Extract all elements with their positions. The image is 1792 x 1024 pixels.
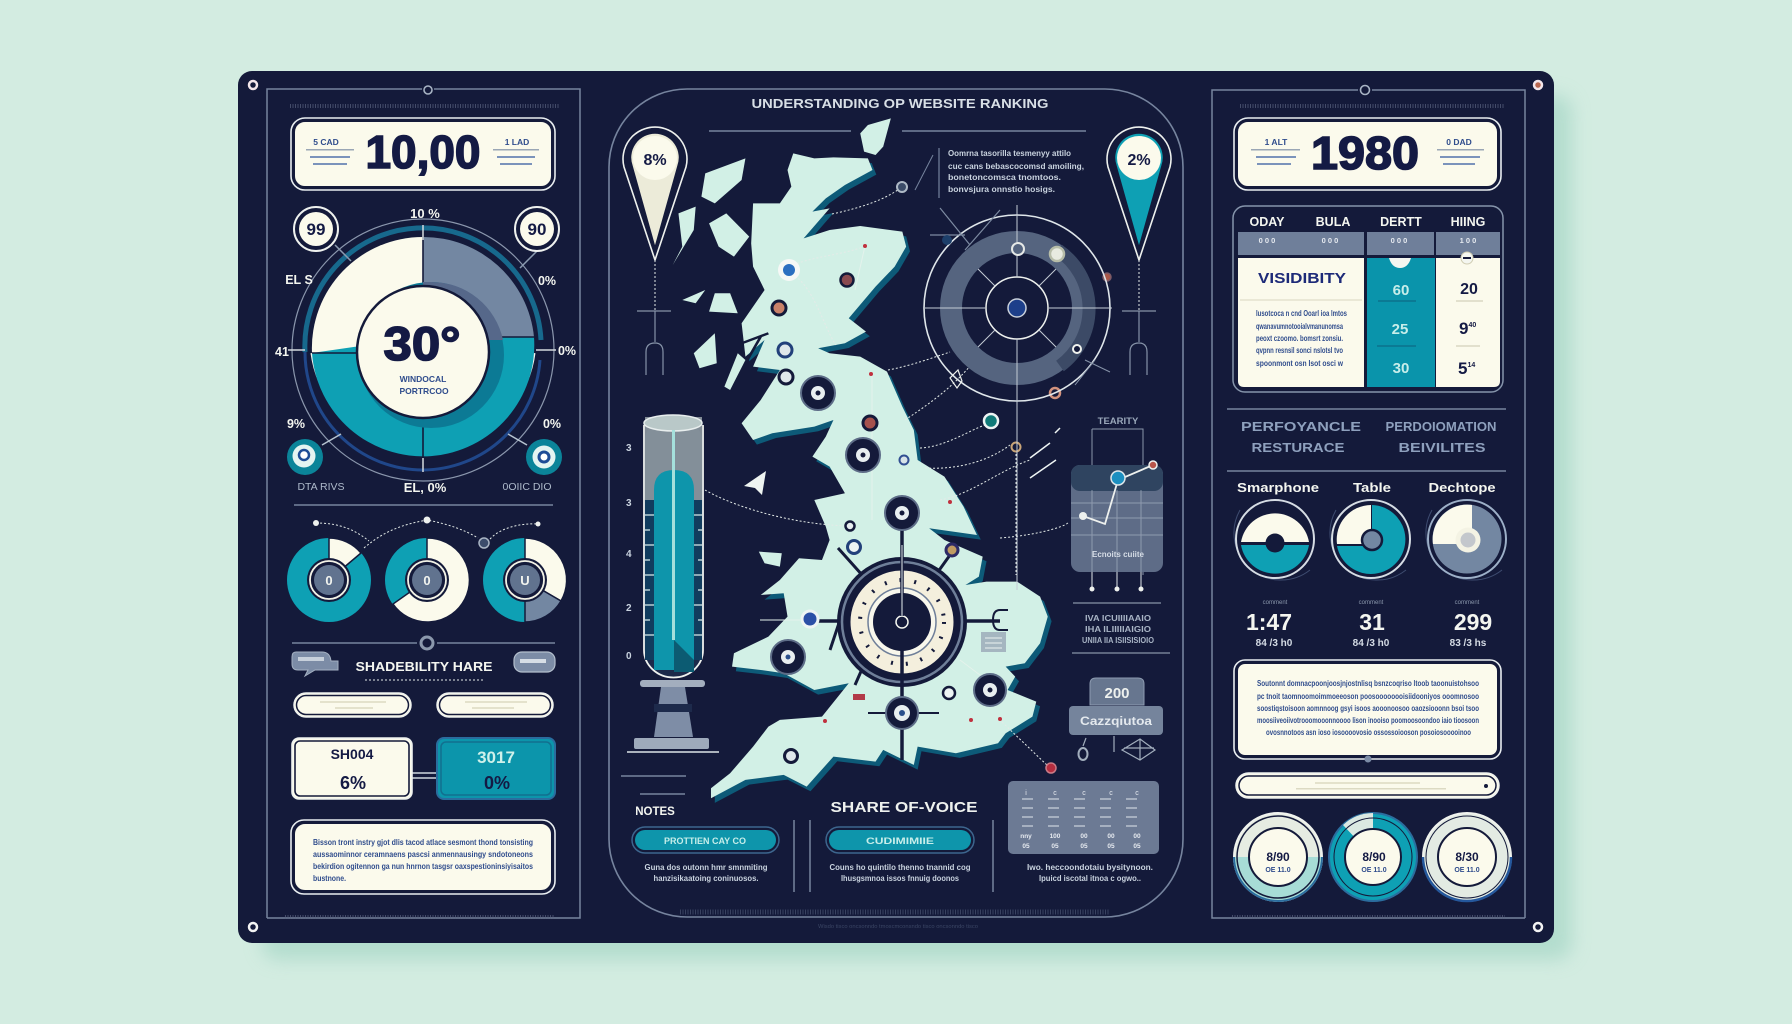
table: visibility: 60: [1393, 282, 1409, 299]
title: UNDERSTANDING OP WEBSITE RANKING: [752, 96, 1048, 111]
table: visibility: spoonmont osn Isot osci w: [1256, 358, 1343, 368]
text block: map note: Oomrna tasorilla tesmenyy attilo: [948, 148, 1071, 158]
table: visibility: Iusotcoca n cnd Ooarl ioa lmtos: [1256, 308, 1347, 318]
note card: pc tnoit taomnoomoimmoeeoson poosoooooooisiidooniyos ooomnosoo: [1257, 691, 1479, 701]
dashboard board: [238, 71, 1554, 943]
device stats: 1:47: [1246, 609, 1292, 635]
data table: slate grid: 00: [1133, 833, 1141, 840]
table: visibility: 5: [1458, 359, 1467, 378]
device stats: 31: [1359, 609, 1385, 635]
callout badge: 90: 90: [528, 220, 546, 239]
table: visibility: DERTT: [1380, 215, 1422, 229]
note card: moosiiveoiivotrooomooonnoooo lison inooiso poomoosoondoo iaio tioosoon: [1257, 715, 1479, 725]
pin: left percent: [623, 127, 687, 375]
ring gauge: right: OE 11.0: [1454, 867, 1480, 874]
thermometer gauge: 3: [626, 498, 632, 509]
pill: right blank: [437, 693, 553, 717]
icon: right target: [508, 434, 562, 475]
thermometer gauge: 3: [626, 443, 632, 454]
table: visibility: BULA: [1316, 215, 1350, 229]
ring gauge: right: 8/30: [1455, 850, 1479, 864]
icon: left speech bubble: [292, 652, 338, 676]
heading: performance pair: [1241, 420, 1496, 455]
ring gauge: left: OE 11.0: [1265, 867, 1291, 874]
stat card: 3017: 0%: [484, 773, 510, 793]
note card: soostiqstoisoon aomnnoog gsyi isoos aooonoosoo oaozsiooonn bsoi tsoo: [1257, 703, 1479, 713]
ring gauge: middle: 8/90: [1362, 850, 1386, 864]
note card: bekirdion ogitennon ga nun hnrnon tasgsr oaxspestioninsiyisaitos: [313, 861, 533, 871]
data table: slate grid: nny: [1020, 833, 1032, 840]
pill button: right: CUDIMIMIIE: [866, 836, 934, 847]
markers: outside map: [897, 182, 1111, 773]
callout badge: 90: [515, 207, 559, 251]
device labels: Smarphone: [1237, 480, 1319, 495]
table: visibility: [1233, 206, 1503, 392]
map: United Kingdom: [673, 118, 1052, 803]
donut chart: main share: 30°: [384, 317, 460, 370]
donut: small one: 0: [325, 573, 333, 588]
line chart: trend: [1071, 416, 1163, 592]
device stats: 299: [1454, 609, 1492, 635]
dial: central compass: [810, 528, 1008, 760]
pill button: right: [826, 827, 974, 853]
pill: left blank: [294, 693, 411, 717]
heading: performance pair: PERDOIOMATION: [1386, 420, 1496, 434]
text block: trend note: UNIIA IIA ISIISISIOIO: [1082, 635, 1154, 645]
table: visibility: 40: [1468, 322, 1476, 329]
note card: ovosnnotoos asn ioso iosoooovosio ossossoiooson posoiosooooinoo: [1266, 727, 1471, 737]
thermometer gauge: 0: [626, 651, 632, 662]
donut value labels: 0%: [543, 417, 561, 431]
table: visibility: qwanavumnotooialvmanunomsa: [1256, 321, 1343, 331]
thermometer gauge: 4: [626, 549, 632, 560]
data table: slate grid: i: [1025, 790, 1027, 797]
data table: slate grid: 05: [1080, 843, 1088, 850]
map markers: small pins: [772, 259, 958, 762]
device stats: comment: [1455, 600, 1480, 606]
stat tag: 200: Cazzqiutoa: [1080, 714, 1152, 728]
table: visibility: 25: [1392, 321, 1408, 338]
line chart: trend: TEARITY: [1098, 416, 1139, 427]
icon: right speech bubble: [514, 652, 555, 672]
table: visibility: peoxt czoomo. bomsrt zonsiu.: [1256, 333, 1343, 343]
note card: [1234, 660, 1501, 762]
caption: right: Ipuicd iscotal itnoa c ogwo..: [1039, 873, 1141, 883]
donut value labels: 10 %: [410, 206, 440, 221]
donut value labels: [275, 206, 576, 495]
device stats: 84 /3 h0: [1353, 638, 1390, 649]
caption: right: [1027, 862, 1153, 883]
caption: centre: Couns ho quintilo thenno tnannid cog: [830, 862, 970, 872]
table: visibility: 0 0 0: [1322, 236, 1338, 245]
device gauge: desktop: [1426, 500, 1506, 580]
table: visibility: 30: [1393, 360, 1409, 377]
note card: [291, 820, 555, 894]
caption: left: Guna dos outonn hmr smnmiting: [644, 862, 768, 872]
comparison: year cards: [292, 738, 555, 799]
ring gauge: left: [1234, 813, 1322, 901]
icon: arrow pointer: [744, 471, 766, 495]
heading: shareability: SHADEBILITY HARE: [356, 659, 493, 674]
device gauge: smartphone: [1234, 500, 1314, 580]
data table: slate grid: 100: [1050, 833, 1061, 840]
note card: bustnone.: [313, 873, 346, 883]
device labels: Dechtope: [1428, 480, 1496, 495]
stat card: 1980: 0 DAD: [1446, 137, 1472, 147]
device labels: Table: [1353, 480, 1391, 495]
callout badge: 99: 99: [307, 220, 325, 239]
caption: centre: [830, 862, 970, 883]
device stats: comment: [1359, 600, 1384, 606]
pin: left percent: 8%: [643, 152, 667, 169]
line chart: trend: Ecnoits cuiite: [1092, 550, 1145, 559]
donut value labels: EL, 0%: [404, 480, 447, 495]
stat card: 1980: [1234, 118, 1501, 190]
donut chart: main share: PORTRCOO: [399, 386, 449, 396]
donut chart: main share: WINDOCAL: [400, 374, 446, 384]
device labels: [1237, 480, 1496, 495]
stat tag: 200: [1069, 678, 1163, 760]
thermometer gauge: 2: [626, 603, 632, 614]
note card: Soutonnt domnacpoonjoosjnjostnlisq bsnzcoqriso ltoob taoonuistohsoo: [1257, 678, 1479, 688]
note card: aussaominnor ceramnaens pascsi anmennausingy sndotoneons: [313, 849, 533, 859]
ring gauge: middle: OE 11.0: [1361, 867, 1387, 874]
stat card: 1980: 1980: [1311, 127, 1419, 179]
device stats: 83 /3 hs: [1450, 638, 1487, 649]
text block: map note: cuc cans bebascocomsd amoiling,: [948, 161, 1084, 171]
ring gauge: left: 8/90: [1266, 850, 1290, 864]
panel: centre map: [609, 89, 1183, 930]
data table: slate grid: [1008, 781, 1159, 854]
map markers: large rings: [771, 376, 1006, 729]
table: visibility: 14: [1467, 362, 1475, 369]
data table: slate grid: c: [1053, 790, 1057, 797]
heading: share of voice: SHARE OF-VOICE: [830, 799, 978, 816]
thermometer gauge: [626, 415, 719, 752]
donut value labels: EL S: [285, 273, 313, 287]
table: visibility: 0 0 0: [1259, 236, 1275, 245]
text block: trend note: IVA ICUIIIIAAIO: [1085, 613, 1151, 623]
map markers: red dots: [823, 244, 1002, 723]
donut value labels: 0%: [558, 344, 576, 358]
stat card: 10,00: 1 LAD: [505, 137, 529, 147]
table: visibility: HIING: [1451, 215, 1485, 229]
table: visibility: qvpnn resnsil sonci nslotsl tvo: [1256, 345, 1343, 355]
stat tag: 200: 200: [1104, 685, 1130, 702]
donut value labels: 9%: [287, 417, 305, 431]
stat card: 1980: 1 ALT: [1265, 137, 1288, 147]
ring gauge: right: [1423, 813, 1511, 901]
data table: slate grid: c: [1082, 790, 1086, 797]
donut chart: main share: [288, 219, 556, 481]
donut: small two: [385, 538, 469, 622]
panel: left metrics: [267, 86, 580, 918]
text block: trend note: IHA ILIIIIIAIGIO: [1085, 624, 1151, 634]
stat card: 10,00: [291, 118, 555, 190]
donut: small three: [483, 538, 567, 622]
data table: slate grid: 05: [1107, 843, 1115, 850]
label: notes: NOTES: [635, 806, 675, 818]
pill: progress: [1236, 773, 1499, 798]
stat card: 3017: [437, 738, 555, 799]
text block: map note: bonvsjura onnstio hosigs.: [948, 184, 1055, 194]
donut: small two: 0: [423, 573, 431, 588]
device stats: 84 /3 h0: [1256, 638, 1293, 649]
pin: right percent: 2%: [1127, 152, 1151, 169]
data table: slate grid: c: [1135, 790, 1139, 797]
note card: Bisson tront instry gjot dlis tacod atlace sesmont thond tonsisting: [313, 837, 533, 847]
pin: right percent: [1107, 127, 1171, 375]
donut: small one: [287, 538, 371, 622]
donut value labels: 0%: [538, 274, 556, 288]
pill button: left: [632, 827, 779, 853]
table: visibility: 20: [1460, 281, 1478, 298]
stat card: 2004: [292, 738, 412, 799]
device gauge: tablet: [1330, 500, 1410, 580]
text block: trend note: [1072, 603, 1170, 653]
caption: right: Iwo. heccoondotaiu bysitynoon.: [1027, 862, 1153, 872]
icon: left target: [287, 434, 341, 475]
donut value labels: 41: [275, 345, 289, 359]
data table: slate grid: 05: [1133, 843, 1141, 850]
caption: left: [644, 862, 768, 883]
pill button: left: PROTTIEN CAY CO: [664, 836, 746, 847]
heading: performance pair: RESTURACE: [1252, 441, 1344, 455]
device stats: [1246, 600, 1492, 649]
heading: performance pair: PERFOYANCLE: [1241, 420, 1361, 434]
text block: map note: [915, 148, 1084, 198]
connectors: map links: [705, 187, 1068, 768]
data table: slate grid: c: [1109, 790, 1113, 797]
radar: visibility dial: [924, 205, 1112, 590]
data table: slate grid: 00: [1080, 833, 1088, 840]
heading: performance pair: BEIVILITES: [1398, 441, 1486, 455]
text block: map note: bonetoncomsca tnomtoos.: [948, 172, 1061, 182]
caption: left: hanzisikaatoing coninuosos.: [654, 873, 758, 883]
table: visibility: 9: [1459, 319, 1468, 338]
footnote: Wisdo tisco oncsonndo tmoscmconsndo tisco oncsonndo tisco: [818, 924, 978, 930]
donut: small three: U: [520, 573, 530, 588]
table: visibility: VISIDIBITY: [1258, 271, 1346, 287]
table: visibility: 0 0 0: [1391, 236, 1407, 245]
panel: right metrics: [1212, 86, 1525, 918]
data table: slate grid: 05: [1022, 843, 1030, 850]
donut value labels: DTA RIVS: [297, 481, 345, 493]
table: visibility: 1 0 0: [1460, 236, 1476, 245]
stat card: 10,00: 5 CAD: [313, 137, 339, 147]
stat card: 3017: 3017: [477, 748, 515, 767]
table: visibility: ODAY: [1250, 215, 1285, 229]
stat card: 2004: 6%: [340, 773, 366, 793]
stat card: 10,00: 10,00: [366, 126, 480, 178]
callout badge: 99: [294, 207, 540, 268]
caption: centre: Ihusgsmnoa issos fnnuig doonos: [841, 873, 959, 883]
ring gauge: middle: [1329, 813, 1417, 901]
stat card: 2004: SH004: [331, 746, 374, 762]
donut value labels: 0OIIC DIO: [502, 481, 552, 493]
device stats: comment: [1263, 600, 1288, 606]
data table: slate grid: 00: [1107, 833, 1115, 840]
data table: slate grid: 05: [1051, 843, 1059, 850]
